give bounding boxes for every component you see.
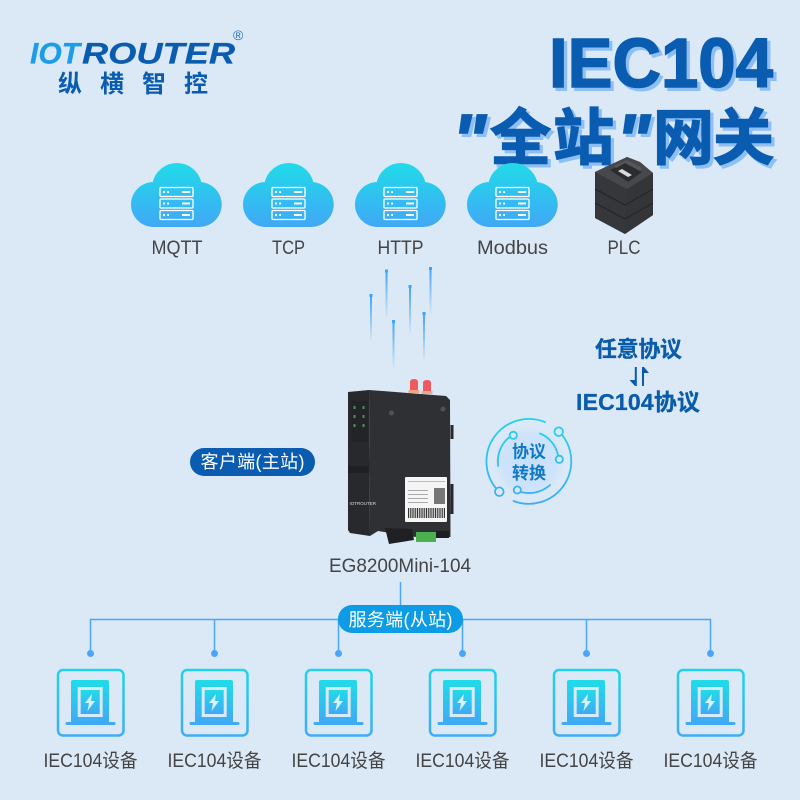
upward signal arrows <box>370 267 432 370</box>
device icon 2: IEC104设备 <box>168 750 262 772</box>
title: 全 <box>493 107 554 175</box>
antennas <box>408 379 432 394</box>
protocol conversion badge <box>486 419 571 504</box>
cloud: TCP: TCP <box>272 238 305 259</box>
logo <box>30 27 244 98</box>
cloud: Modbus <box>467 163 558 259</box>
logo: ® <box>233 27 244 43</box>
client pill <box>190 448 315 476</box>
title: 网 <box>653 104 714 172</box>
cloud: TCP <box>243 163 334 259</box>
logo: IOT <box>30 38 83 70</box>
title: 全 <box>490 104 551 172</box>
device icon 2 <box>168 670 262 772</box>
cloud: Modbus: Modbus <box>477 238 548 259</box>
server pill: 服务端(从站) <box>348 610 452 630</box>
protocol text: 任意协议 <box>595 337 682 362</box>
gateway device <box>348 379 454 544</box>
conversion arrows <box>630 367 649 386</box>
device icon 5 <box>540 670 634 772</box>
title: IEC104 <box>552 27 776 105</box>
device icon 4 <box>416 670 510 772</box>
cloud: MQTT: MQTT <box>152 238 203 259</box>
title <box>452 24 777 184</box>
protocol conversion badge: 协议 <box>512 442 546 462</box>
title: " <box>619 104 654 184</box>
cloud: HTTP <box>355 163 446 259</box>
cloud: MQTT <box>131 163 222 259</box>
device icon 3: IEC104设备 <box>292 750 386 772</box>
server pill <box>338 605 463 633</box>
gateway device: IOTROUTER <box>350 501 377 506</box>
PLC <box>595 157 653 259</box>
device icon 6: IEC104设备 <box>664 750 758 772</box>
title: 关 <box>713 104 774 172</box>
protocol conversion badge: 转换 <box>512 464 546 483</box>
cloud: HTTP: HTTP <box>378 238 424 259</box>
device icon 5: IEC104设备 <box>540 750 634 772</box>
device icon 3 <box>292 670 386 772</box>
title: " <box>455 104 490 184</box>
title: " <box>616 101 651 181</box>
protocol text <box>576 337 700 415</box>
title: " <box>452 101 487 181</box>
title: 网 <box>656 107 717 175</box>
title: IEC104 <box>549 24 773 102</box>
title: 站 <box>556 107 617 175</box>
title: 关 <box>716 107 777 175</box>
logo: 纵横智控 <box>58 71 208 98</box>
protocol text: IEC104协议 <box>576 389 700 415</box>
device icon 1: IEC104设备 <box>44 750 138 772</box>
logo: ROUTER <box>82 38 235 70</box>
device name: EG8200Mini-104 <box>329 556 471 577</box>
device icon 1 <box>44 670 138 772</box>
connector tree <box>87 582 714 657</box>
client pill: 客户端(主站) <box>200 452 304 472</box>
device icon 6 <box>664 670 758 772</box>
title: 站 <box>553 104 614 172</box>
device icon 4: IEC104设备 <box>416 750 510 772</box>
device label <box>405 477 447 522</box>
PLC: PLC <box>608 238 640 259</box>
